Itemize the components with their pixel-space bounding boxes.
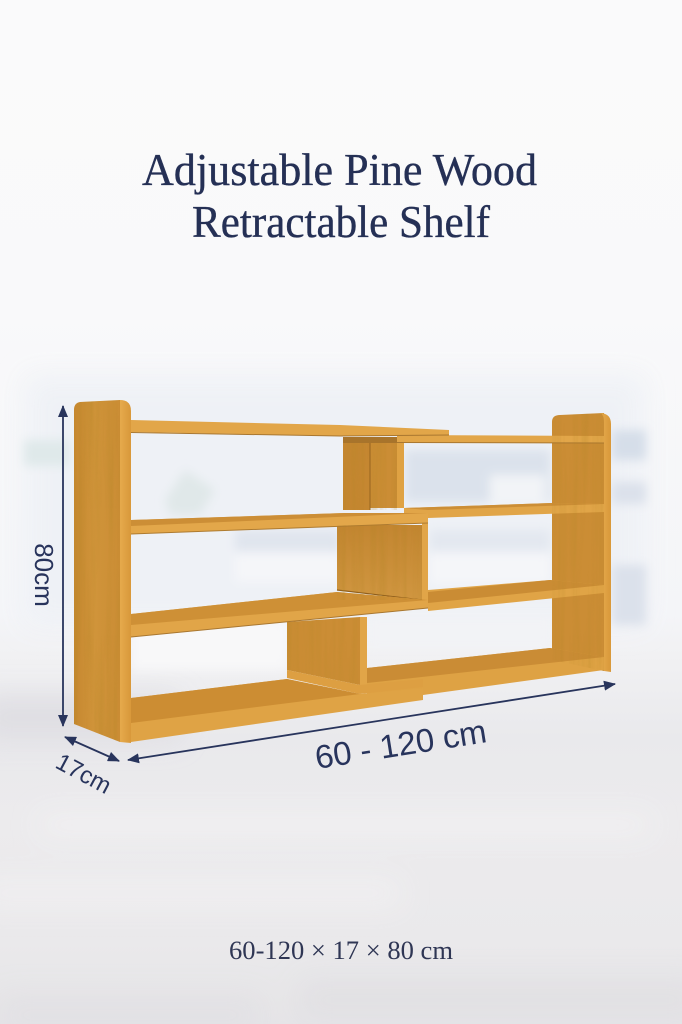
depth label: 17cm [51, 748, 116, 800]
width label: 60 - 120 cm [312, 712, 489, 776]
bottom dimensions caption: 60-120 × 17 × 80 cm [229, 936, 453, 965]
depth dimension arrow [65, 737, 119, 761]
height label: 80cm [29, 543, 59, 607]
title: Retractable Shelf [192, 197, 490, 247]
title: Adjustable Pine Wood [142, 145, 537, 195]
shelf: adjustable pine wood retractable unit [60, 395, 620, 750]
height dimension arrow [62, 406, 64, 726]
right shelves [367, 435, 604, 695]
third left shelf [131, 592, 428, 637]
top left shelf [131, 420, 449, 436]
bottom left shelf [131, 679, 423, 742]
right side panel [552, 413, 611, 672]
width dimension arrow [128, 684, 615, 760]
lower center support block [287, 617, 423, 694]
upper center support block [343, 437, 404, 510]
second left shelf [131, 513, 428, 534]
middle center support block [337, 522, 428, 600]
left side panel [74, 400, 131, 743]
title [142, 145, 537, 247]
